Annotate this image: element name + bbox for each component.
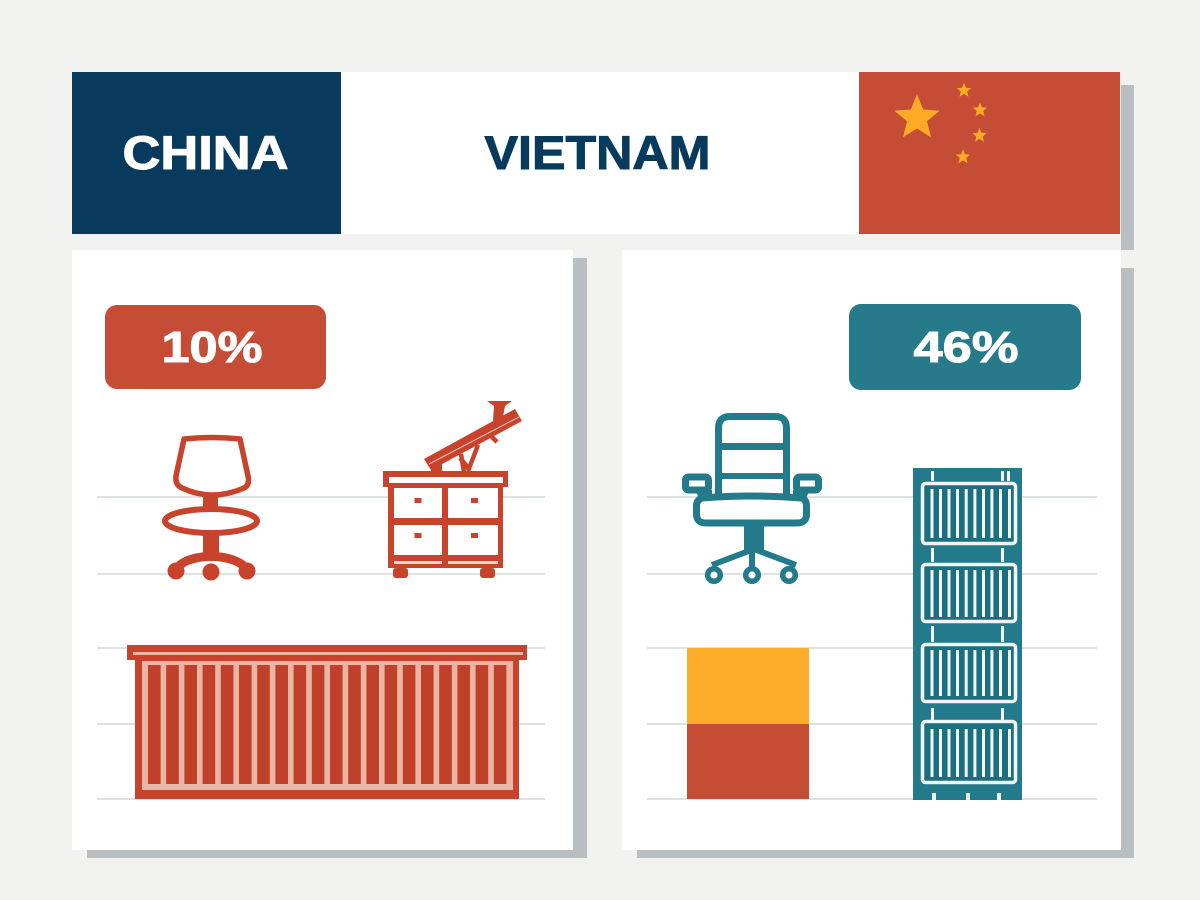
- icon: China flag: [859, 72, 1120, 234]
- icon: red shipping container: [127, 645, 527, 799]
- icon: stacked teal containers: [913, 468, 1022, 800]
- badge: 10%: 10%: [162, 323, 262, 372]
- icon: teal executive chair: [686, 416, 818, 581]
- header band: [72, 72, 1120, 234]
- icon: red office chair: [165, 438, 257, 580]
- China label block: [72, 72, 341, 234]
- panel: China: [72, 250, 573, 850]
- badge: 10%: [105, 305, 326, 389]
- Vietnam label: VIETNAM: [484, 126, 710, 179]
- badge: 46%: [849, 304, 1081, 390]
- icon: red cabinet with tilted drafting board: [383, 401, 522, 578]
- stacked bar: orange and red: [687, 648, 809, 799]
- China label block: CHINA: [122, 126, 288, 179]
- panel: Vietnam: [622, 250, 1121, 850]
- badge: 46%: 46%: [914, 323, 1018, 372]
